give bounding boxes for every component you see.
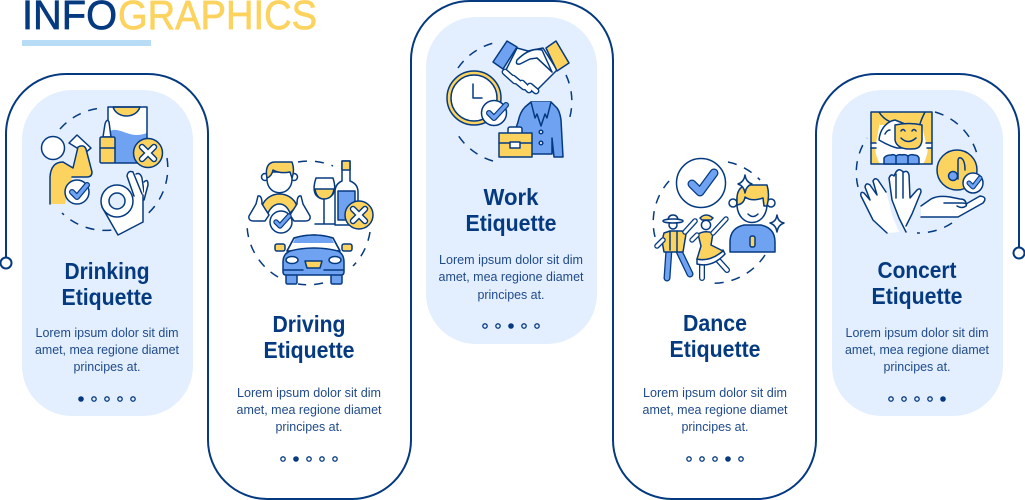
heading: Driving [272,311,346,337]
body text: Lorem ipsum dolor sit dim [439,252,583,267]
panel: drinking etiquette [22,90,193,416]
panel: driving etiquette [236,161,382,462]
body text: principes at. [276,419,342,434]
heading [264,311,354,363]
heading: Concert [878,257,957,283]
body text: amet, mea regione diamet [642,402,788,417]
body text: amet, mea regione diamet [438,269,584,284]
heading [62,258,152,310]
body text [845,325,989,374]
body text: amet, mea regione diamet [35,342,179,357]
heading: Etiquette [62,284,152,310]
pagination dots [687,456,743,462]
body text: Lorem ipsum dolor sit dim [846,325,988,340]
pagination dots [889,396,946,402]
body text: amet, mea regione diamet [236,402,382,417]
icon: dance [653,158,784,283]
icon: concert [856,112,985,233]
heading: Etiquette [264,337,354,363]
body text [642,385,788,434]
icon: drinking [42,107,168,235]
pagination dots [483,323,539,329]
body text: principes at. [884,359,950,374]
heading: Etiquette [466,210,556,236]
heading [466,184,556,236]
pagination dots [78,396,135,402]
icon: work [447,41,572,161]
body text: Lorem ipsum dolor sit dim [643,385,787,400]
panel: dance etiquette [642,158,788,462]
title [22,0,317,38]
heading: Etiquette [872,283,962,309]
body text [438,252,584,302]
panel: work etiquette [426,17,597,344]
body text: Lorem ipsum dolor sit dim [237,385,381,400]
heading: Drinking [64,258,150,284]
heading: Work [484,184,539,210]
body text: principes at. [74,359,140,374]
body text [236,385,382,434]
pagination dots [281,456,337,462]
body text: principes at. [478,287,544,302]
heading [670,310,760,362]
body text: amet, mea regione diamet [845,342,989,357]
title underline [22,40,151,46]
body text: principes at. [682,419,748,434]
heading: Dance [683,310,747,336]
heading [872,257,962,309]
panel: concert etiquette [832,90,1003,416]
body text [35,325,179,374]
heading: Etiquette [670,336,760,362]
icon: driving [247,161,373,285]
body text: Lorem ipsum dolor sit dim [36,325,178,340]
